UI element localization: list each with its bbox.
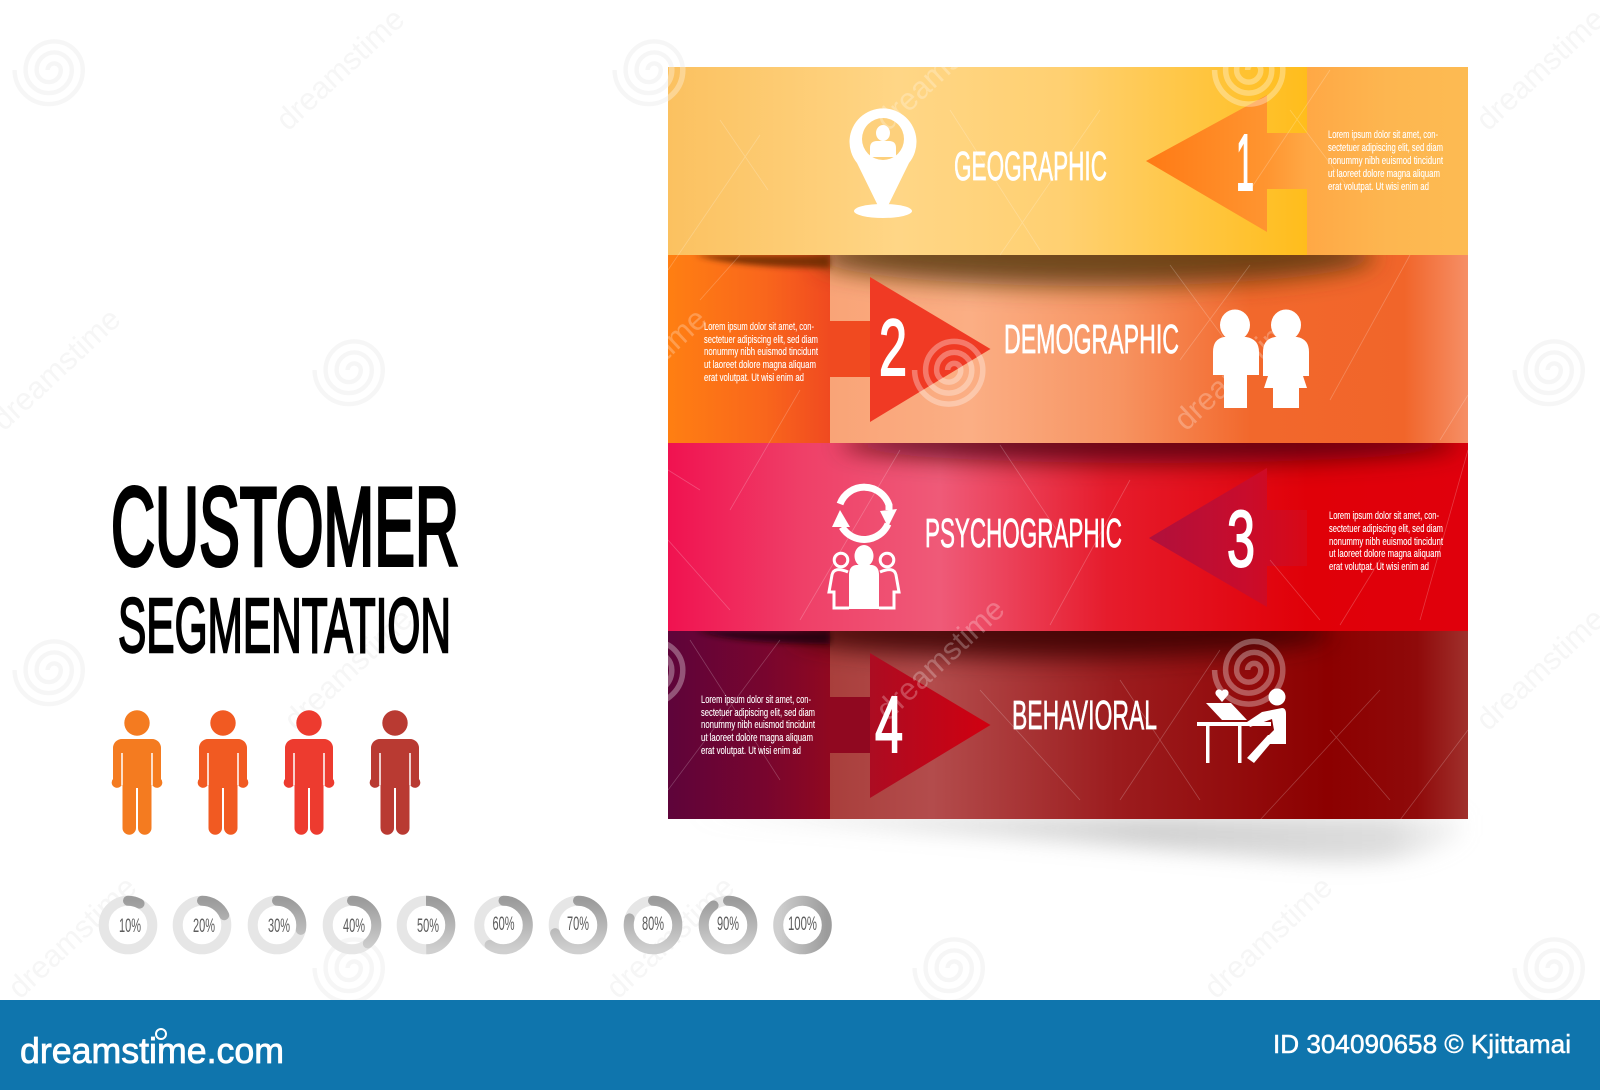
- donut 60%: 60%: [492, 914, 515, 935]
- panel 4: behavioral: [668, 631, 1468, 819]
- body text: ut laoreet dolore magna aliquam: [1328, 168, 1440, 180]
- body text: sectetuer adipiscing elit, sed diam: [704, 334, 818, 346]
- watermark over panels: dreamstime: [869, 1, 1011, 137]
- donut 10%: [104, 901, 152, 949]
- cast shadow: [840, 423, 1460, 463]
- number 2: 2: [879, 303, 907, 392]
- people row: [112, 710, 420, 835]
- watermark on white background: dreamstime: [599, 869, 741, 1005]
- person icon: deep orange: [198, 710, 248, 835]
- footer bar: [0, 1000, 1600, 1090]
- panel 2: demographic: [668, 255, 1468, 443]
- donut 50%: 50%: [417, 916, 439, 937]
- body text: ut laoreet dolore magna aliquam: [1329, 548, 1441, 560]
- donut 80%: [629, 901, 677, 949]
- panel 1: geographic: [668, 67, 1468, 255]
- icon: group with cycle: [829, 487, 899, 609]
- label psychographic: PSYCHOGRAPHIC: [925, 510, 1122, 556]
- arrow 3: [1149, 468, 1307, 607]
- watermark on white background: dreamstime: [1197, 869, 1339, 1005]
- watermark over panels: dreamstime: [571, 301, 713, 437]
- body text: nonummy nibh euismod tincidunt: [1328, 155, 1443, 167]
- body text: [701, 694, 815, 757]
- cast shadow: [698, 631, 1335, 673]
- arrow 4: [870, 653, 990, 798]
- percentage donut row: [104, 901, 827, 949]
- body text: sectetuer adipiscing elit, sed diam: [1329, 523, 1443, 535]
- icon: couple: [1213, 310, 1309, 408]
- donut 100%: 100%: [788, 914, 817, 935]
- shaft: [830, 697, 870, 753]
- band background: [830, 631, 1468, 819]
- body text: [1329, 510, 1443, 573]
- number 4: 4: [875, 680, 903, 769]
- cast shadow: [696, 255, 1386, 304]
- watermark over panels: dreamstime: [1167, 301, 1309, 437]
- body text: [1328, 129, 1443, 193]
- title: CUSTOMER: [111, 465, 459, 589]
- body text: [704, 321, 818, 384]
- body text: sectetuer adipiscing elit, sed diam: [1328, 142, 1443, 154]
- donut 50%: [402, 901, 450, 949]
- body text: erat volutpat. Ut wisi enim ad: [1328, 181, 1429, 193]
- label demographic: DEMOGRAPHIC: [1004, 316, 1179, 362]
- donut 20%: [178, 901, 226, 949]
- number 3: 3: [1227, 494, 1255, 583]
- donut 70%: 70%: [567, 914, 589, 935]
- donut 100%: [778, 901, 827, 949]
- donut 20%: 20%: [193, 916, 215, 937]
- body text: nonummy nibh euismod tincidunt: [704, 346, 818, 358]
- band background: [668, 443, 1468, 631]
- band background: [830, 255, 1468, 443]
- body text: sectetuer adipiscing elit, sed diam: [701, 707, 815, 719]
- donut 90%: 90%: [717, 914, 739, 935]
- body text: erat volutpat. Ut wisi enim ad: [701, 745, 801, 757]
- donut 80%: 80%: [642, 914, 664, 935]
- donut 40%: [328, 901, 376, 949]
- person icon: dark red: [370, 710, 420, 835]
- body text: ut laoreet dolore magna aliquam: [704, 359, 816, 371]
- side section: [668, 631, 830, 819]
- band background: [668, 67, 1307, 255]
- side section: [1307, 67, 1468, 255]
- person icon: orange: [112, 710, 162, 835]
- title: SEGMENTATION: [118, 583, 451, 669]
- body text: Lorem ipsum dolor sit amet, con-: [1329, 510, 1439, 522]
- footer credit: ID 304090658 © Kjittamai: [1273, 1029, 1571, 1059]
- person icon: red: [284, 710, 334, 835]
- watermark on white background: dreamstime: [277, 601, 419, 737]
- arrow 1: [1146, 95, 1307, 232]
- watermark over panels: dreamstime: [869, 591, 1011, 727]
- label geographic: GEOGRAPHIC: [954, 143, 1107, 189]
- label behavioral: BEHAVIORAL: [1012, 692, 1157, 738]
- body text: Lorem ipsum dolor sit amet, con-: [1328, 129, 1438, 141]
- panel 1: geographic: 1: [1236, 118, 1254, 207]
- icon: person at desk: [1197, 688, 1286, 763]
- icon: map pin: [850, 108, 916, 218]
- donut 90%: [704, 901, 752, 949]
- body text: erat volutpat. Ut wisi enim ad: [1329, 561, 1429, 573]
- title: [111, 465, 459, 669]
- donut 30%: 30%: [268, 916, 290, 937]
- shaft: [830, 321, 870, 377]
- watermark over panels: [668, 67, 1468, 819]
- arrow 2: [830, 277, 990, 422]
- panel 3: psychographic: [668, 423, 1468, 631]
- donut 70%: [554, 901, 602, 949]
- watermark on white background: dreamstime: [1, 869, 143, 1005]
- body text: nonummy nibh euismod tincidunt: [1329, 536, 1443, 548]
- body text: erat volutpat. Ut wisi enim ad: [704, 372, 804, 384]
- body text: ut laoreet dolore magna aliquam: [701, 732, 813, 744]
- body text: Lorem ipsum dolor sit amet, con-: [701, 694, 811, 706]
- footer logo: dreamstime.com: [20, 1030, 284, 1071]
- watermark on white background: dreamstime: [269, 1, 411, 137]
- bottom panel shadow: [690, 815, 1462, 862]
- body text: Lorem ipsum dolor sit amet, con-: [704, 321, 814, 333]
- side section: [668, 255, 830, 443]
- body text: nonummy nibh euismod tincidunt: [701, 719, 815, 731]
- donut 10%: 10%: [119, 916, 141, 937]
- donut 60%: [479, 901, 528, 949]
- donut 30%: [253, 901, 301, 949]
- donut 40%: 40%: [343, 916, 365, 937]
